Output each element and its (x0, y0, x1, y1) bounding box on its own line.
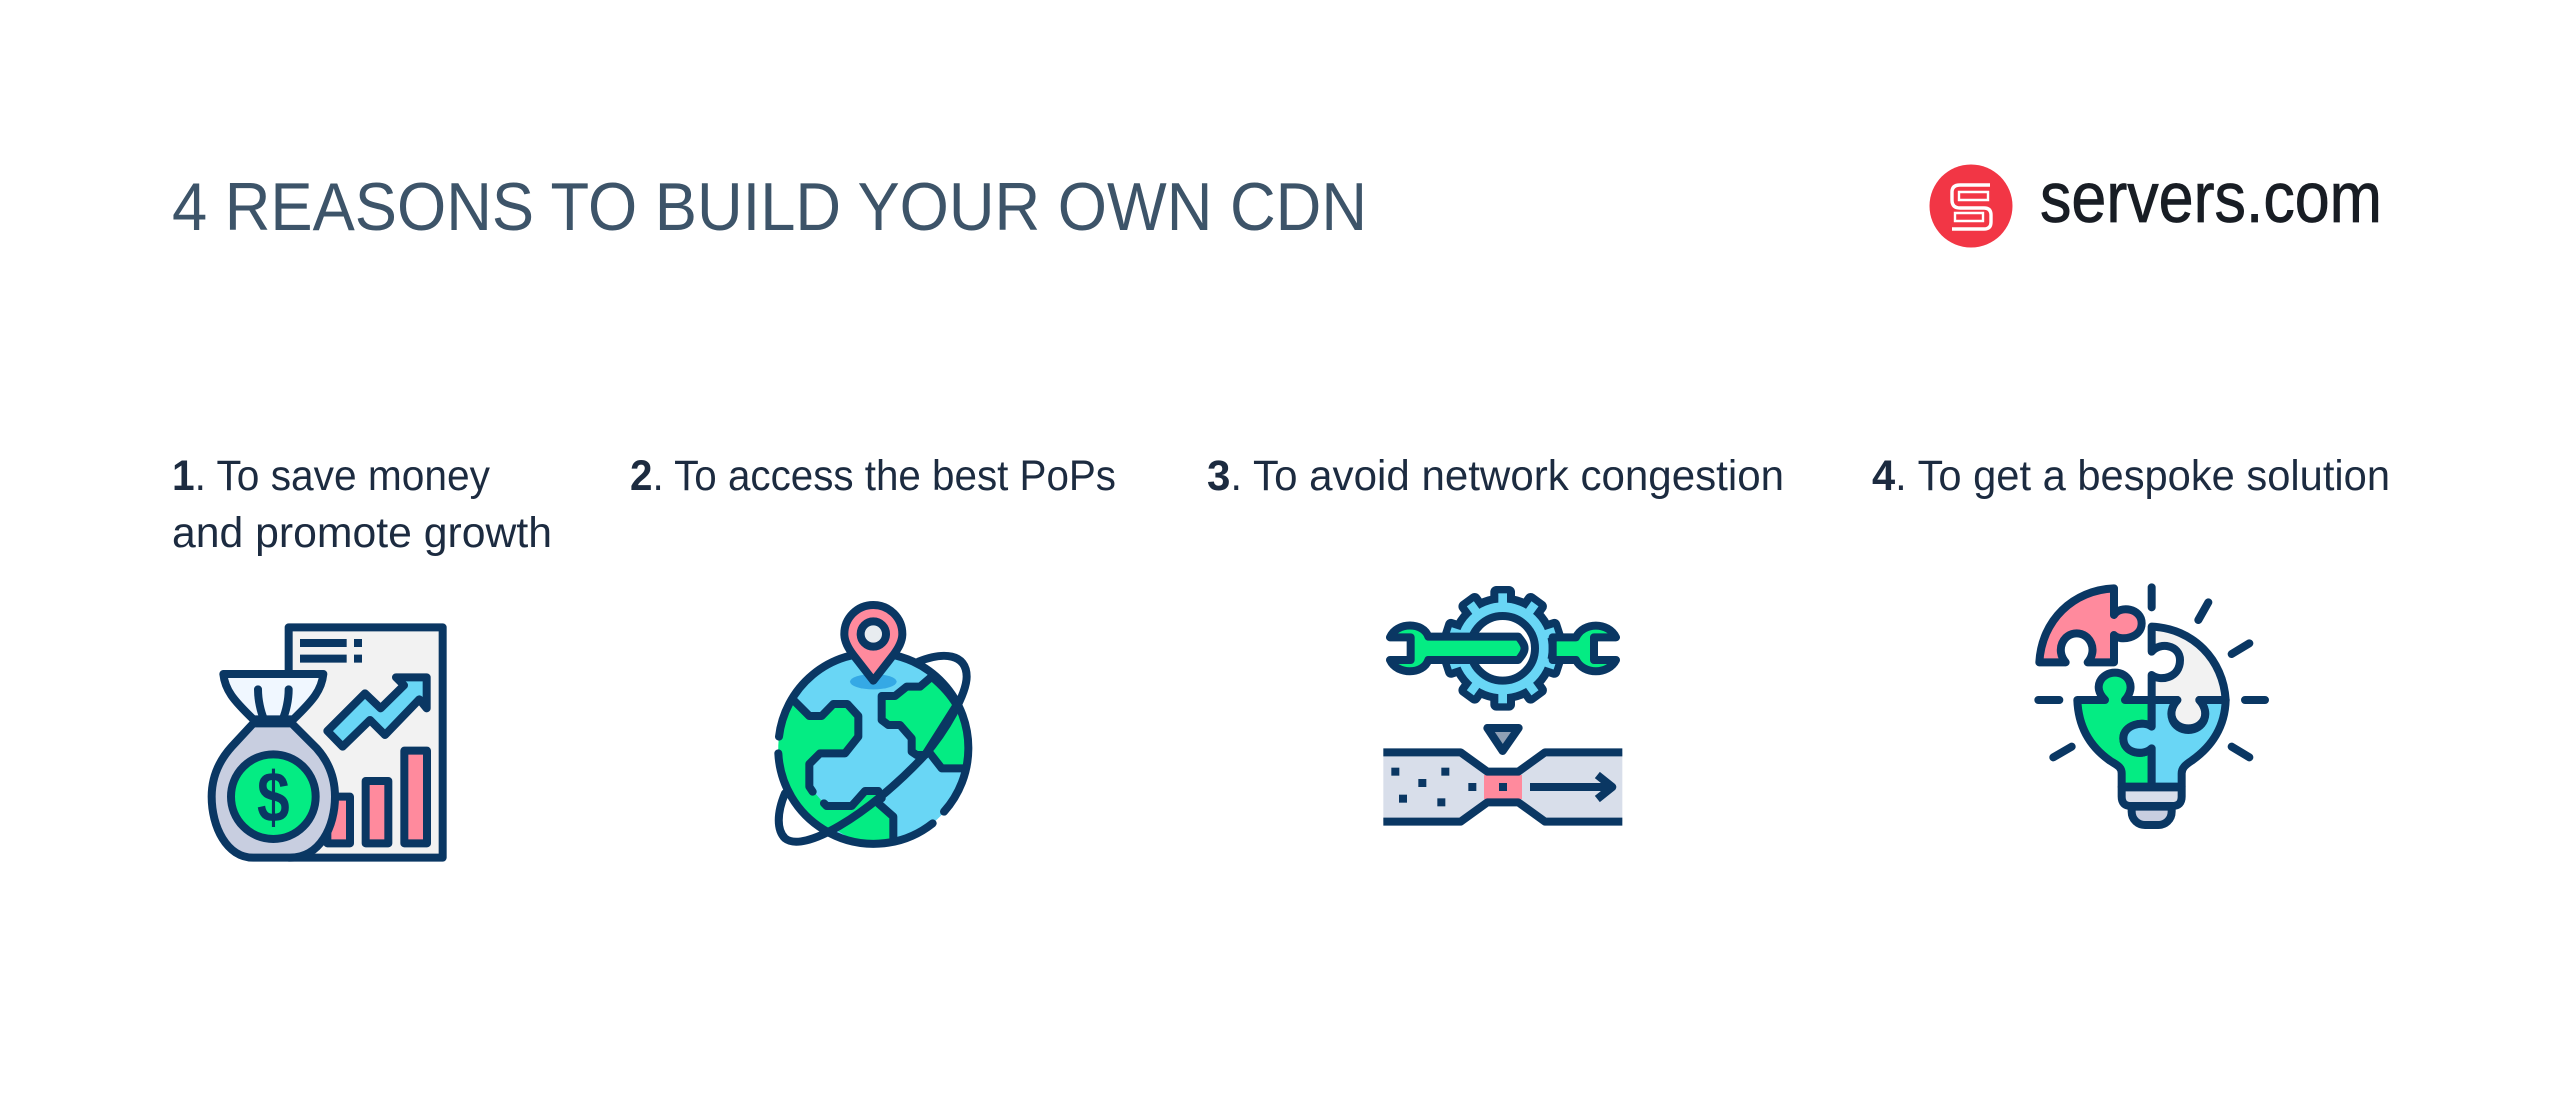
growth arrow (327, 677, 427, 747)
pin shadow (850, 674, 897, 689)
coin (231, 754, 316, 839)
logo: servers.com (1930, 159, 2382, 248)
title: 4 REASONS TO BUILD YOUR OWN CDN (172, 169, 1367, 245)
logo wordmark: servers.com (2040, 159, 2382, 238)
orbit (779, 656, 967, 842)
packets (1391, 768, 1507, 806)
gear hole (1470, 616, 1535, 681)
gear body (1453, 598, 1553, 698)
reason 2 heading: 2. To access the best PoPs (630, 452, 1116, 500)
wrench left (1390, 625, 1525, 671)
reason 1 heading: 1. To save money (172, 452, 490, 500)
globe fill (778, 654, 968, 844)
report text lines (300, 643, 362, 659)
reason 4 heading: 4. To get a bespoke solution (1872, 452, 2390, 500)
rays (2038, 587, 2265, 757)
east continent (930, 713, 968, 768)
flow arrow (1530, 775, 1612, 799)
warning triangle (1487, 728, 1519, 751)
logo mark (1930, 164, 2012, 248)
bottleneck (1484, 775, 1522, 799)
icon: money bag and growth report (208, 623, 447, 862)
left continent (778, 700, 882, 833)
wrench right (1553, 626, 1616, 671)
icon: globe with location pin (774, 601, 972, 848)
globe outline (778, 653, 968, 844)
bars (327, 751, 427, 843)
blue puzzle piece (2123, 700, 2226, 787)
bulb base (2132, 807, 2172, 825)
icon: wrench, gear and network bottleneck (1383, 586, 1622, 826)
gear teeth (1445, 590, 1561, 707)
pink puzzle piece (2039, 588, 2142, 662)
bulb cap (2122, 787, 2182, 806)
location pin (844, 605, 902, 681)
south continent (837, 803, 893, 843)
dollar sign: $ (257, 758, 290, 838)
green puzzle piece (2077, 673, 2152, 787)
bag neck (223, 674, 323, 719)
icon: puzzle light bulb (2034, 583, 2269, 829)
reason 3 heading: 3. To avoid network congestion (1207, 452, 1784, 500)
reason 1 heading (172, 452, 552, 557)
white puzzle piece (2152, 627, 2226, 728)
reason 1 heading: and promote growth (172, 509, 552, 557)
north-east continent (882, 677, 957, 755)
pipe fill (1383, 752, 1622, 822)
report page (289, 627, 443, 858)
pipe walls (1383, 752, 1622, 822)
bag body (212, 723, 335, 858)
